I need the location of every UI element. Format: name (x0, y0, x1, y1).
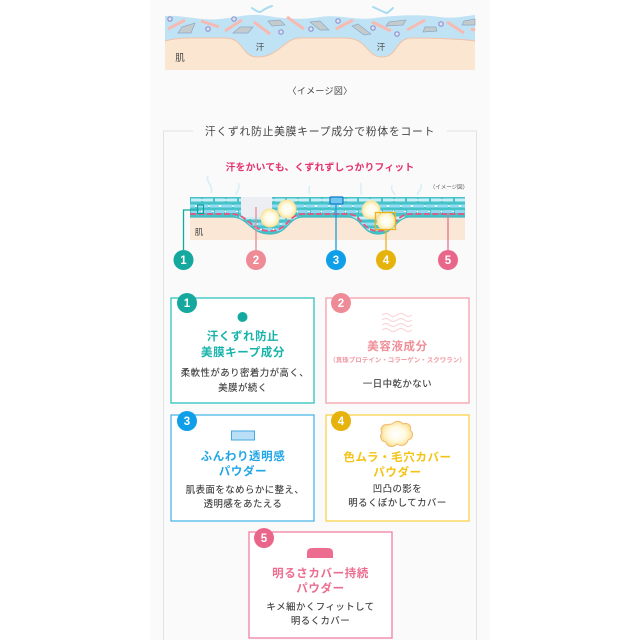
faded film section (241, 197, 272, 217)
icon: brightness powder (307, 548, 333, 558)
small image note: （イメージ図） (430, 184, 468, 191)
blue dot particles (168, 17, 443, 36)
card 1: 美膜キープ成分 (201, 345, 285, 359)
cross-section diagram (190, 176, 465, 240)
card 1: 汗くずれ防止 (207, 329, 279, 343)
icon: teal dot (238, 312, 248, 322)
pink rod particles (168, 17, 475, 34)
skin outline (165, 38, 475, 57)
sweat water layer (165, 15, 475, 57)
number marker 3 (326, 250, 346, 270)
leader lines (184, 204, 448, 250)
card 5: パウダー (296, 581, 345, 595)
card 4: 色ムラ・毛穴カバー (343, 450, 452, 464)
film outer edge (190, 217, 465, 234)
callout highlights (198, 205, 204, 214)
skin label: 肌 (195, 227, 204, 237)
pink headline: 汗をかいても、くずれずしっかりフィット (226, 160, 414, 174)
card 4: パウダー (373, 465, 422, 479)
sweat droplets above surface (252, 6, 393, 13)
grey plate particles (178, 19, 475, 35)
card 2: 美容液成分 (367, 339, 428, 353)
card 3: 透明感をあたえる (204, 498, 282, 509)
number marker 3: 3 (333, 255, 339, 267)
card 1: 柔軟性があり密着力が高く、 (181, 367, 309, 378)
card 3: ふんわり透明感 (201, 449, 285, 463)
card 5: キメ細かくフィットして (266, 601, 375, 612)
number marker 4: 4 (383, 255, 390, 267)
card 3: 肌表面をなめらかに整え、 (186, 484, 304, 495)
number marker 2 (246, 250, 266, 270)
panel frame (164, 131, 476, 640)
card 3: パウダー (219, 464, 267, 478)
icon: cover powder puff (381, 421, 412, 446)
icon: serum waves (382, 314, 412, 332)
image caption: 〈イメージ図〉 (288, 86, 352, 96)
steam wisps (207, 176, 421, 195)
skin (190, 210, 465, 240)
soft focus powder puffs (260, 200, 396, 230)
skin layer (165, 34, 475, 70)
page background band (150, 0, 490, 640)
top illustration: sweat on skin: 肌 (175, 53, 185, 64)
top illustration: sweat on skin (165, 6, 475, 70)
number marker 2: 2 (253, 255, 259, 267)
card 2: 一日中乾かない (363, 378, 432, 389)
card 2: 2 (338, 298, 344, 310)
number marker 4 (376, 250, 396, 270)
number marker 5 (438, 250, 458, 270)
card 4: 凹凸の影を (373, 483, 422, 494)
card 5 (249, 528, 392, 638)
card 4: 4 (338, 416, 345, 428)
card 1: 1 (184, 298, 191, 310)
pink serum line (190, 214, 465, 231)
card 4: 明るくぼかしてカバー (348, 497, 447, 508)
card 1: 美膜が続く (218, 382, 268, 393)
card 5: 明るさカバー持続 (272, 566, 369, 580)
number marker 1: 1 (180, 255, 187, 267)
icon: translucent powder (232, 431, 254, 440)
film layer with particles (190, 197, 465, 234)
card 3 (171, 411, 314, 521)
card 3: 3 (184, 416, 190, 428)
labels: sweat and skin: 汗 (256, 42, 265, 52)
number marker 1 (174, 250, 194, 270)
card 5: 5 (261, 533, 268, 545)
top illustration: sweat on skin: 汗 (377, 42, 386, 52)
card 1 (171, 293, 314, 403)
card 5: 明るくカバー (291, 615, 350, 626)
card 2 (326, 293, 469, 403)
card 2: （真珠プロテイン・コラーゲン・スクワラン） (329, 355, 466, 364)
card 4 (326, 411, 469, 521)
panel heading: 汗くずれ防止美膜キープ成分で粉体をコート (205, 124, 435, 138)
number marker 5: 5 (445, 255, 452, 267)
